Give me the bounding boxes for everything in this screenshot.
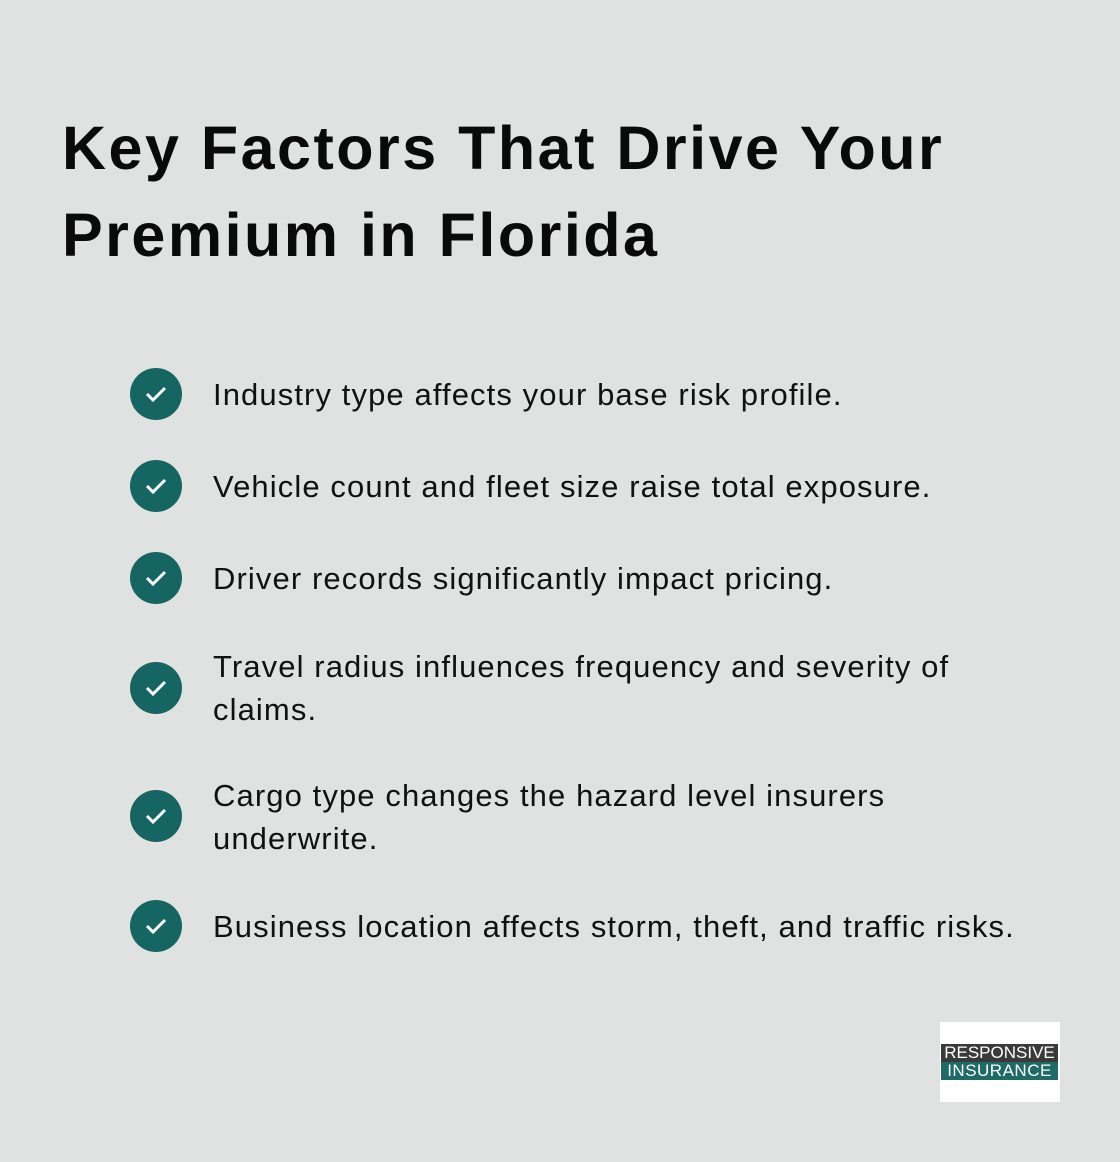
item 5 xyxy=(130,778,885,856)
title: Key Factors That Drive Your xyxy=(62,114,944,182)
logo: RESPONSIVE xyxy=(944,1043,1055,1062)
item 1 xyxy=(130,368,843,420)
item 2: Vehicle count and fleet size raise total exposure. xyxy=(213,469,931,504)
logo xyxy=(940,1022,1060,1102)
item 4: Travel radius influences frequency and severity of xyxy=(213,649,949,684)
item 2 xyxy=(130,460,931,512)
item 6 xyxy=(130,900,1015,952)
item 5: underwrite. xyxy=(213,821,378,856)
title xyxy=(62,114,944,269)
item 3 xyxy=(130,552,833,604)
item 4: claims. xyxy=(213,692,317,727)
title: Premium in Florida xyxy=(62,201,660,269)
item 3: Driver records significantly impact pricing. xyxy=(213,561,833,596)
item 4 xyxy=(130,649,949,727)
item 5: Cargo type changes the hazard level insurers xyxy=(213,778,885,813)
item 1: Industry type affects your base risk profile. xyxy=(213,377,843,412)
item 6: Business location affects storm, theft, and traffic risks. xyxy=(213,909,1015,944)
logo: INSURANCE xyxy=(947,1061,1052,1080)
